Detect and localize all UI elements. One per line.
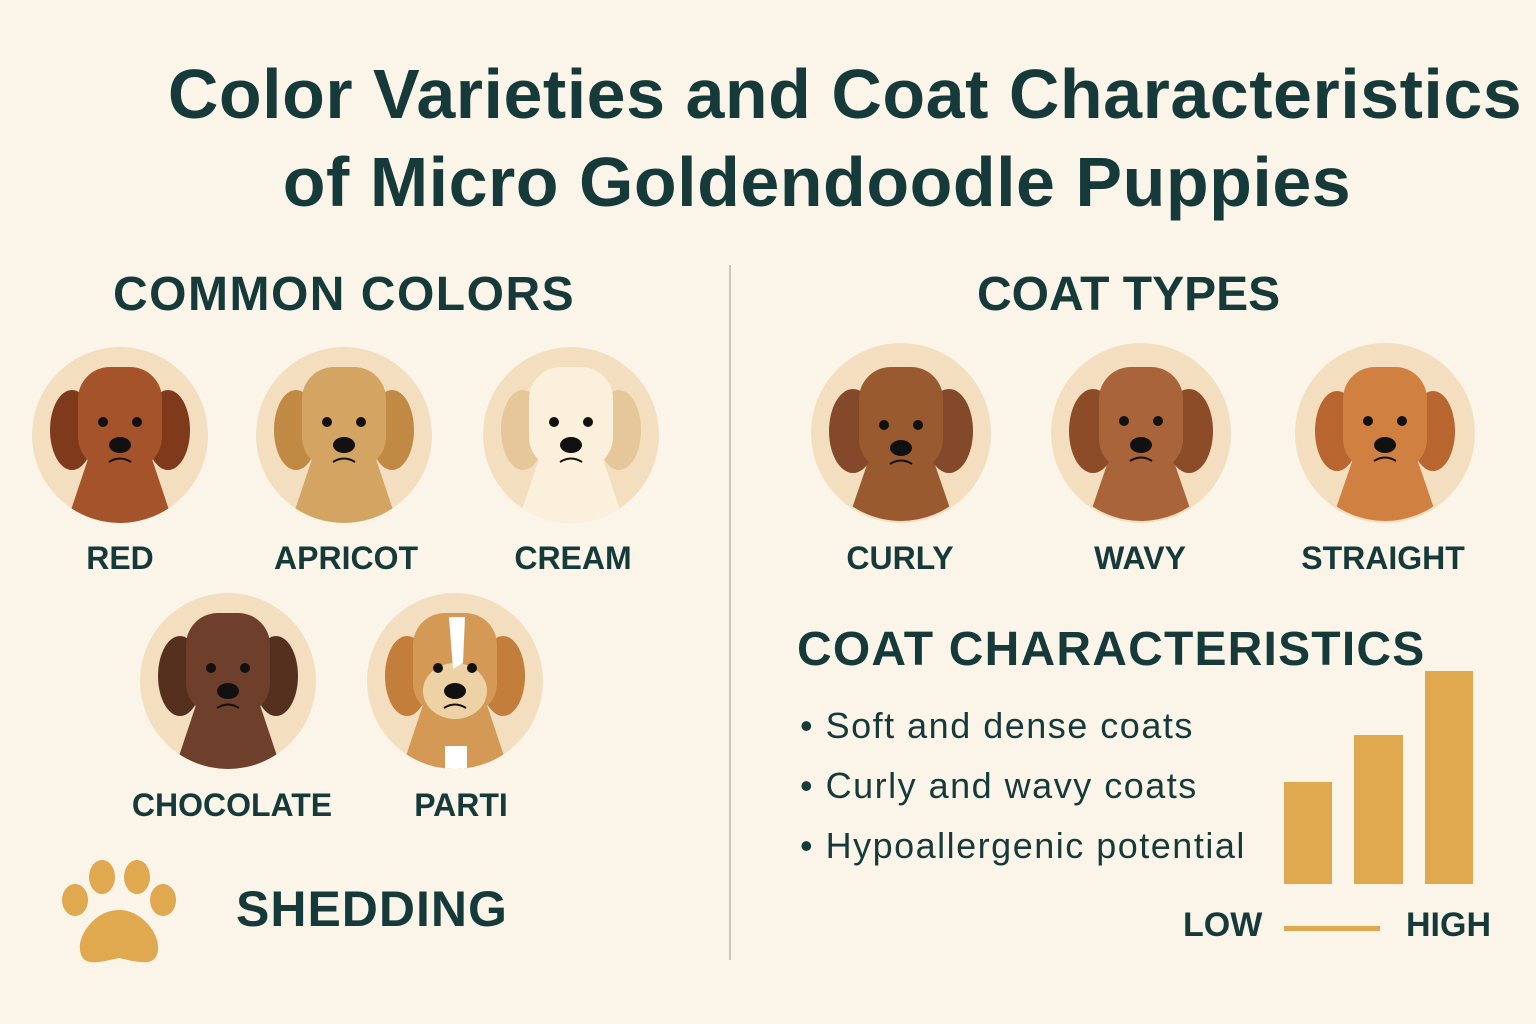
text: WAVY (1094, 540, 1186, 576)
text: STRAIGHT (1301, 540, 1465, 576)
title: of Micro Goldendoodle Puppies (283, 143, 1351, 221)
dog: parti (367, 593, 543, 776)
heading: common colors: COMMON COLORS (113, 268, 575, 321)
text: CREAM (514, 540, 632, 576)
title: Color Varieties and Coat Characteristics (168, 55, 1522, 133)
text: HIGH (1406, 906, 1491, 944)
text: CHOCOLATE (132, 787, 332, 823)
dog illustrations (32, 343, 1475, 962)
bullet list: • Hypoallergenic potential (800, 825, 1246, 866)
dog: cream (483, 347, 659, 525)
bar chart (1284, 671, 1473, 931)
dog: apricot (256, 347, 432, 525)
bullet list: • Curly and wavy coats (800, 765, 1198, 806)
heading: shedding: SHEDDING (236, 881, 508, 937)
dog: curly (811, 343, 991, 523)
bullet list (800, 705, 1246, 866)
bullet list: • Soft and dense coats (800, 705, 1194, 746)
dog: red (32, 347, 208, 525)
heading: coat characteristics: COAT CHARACTERISTICS (797, 623, 1425, 676)
labels: RED (86, 540, 154, 576)
dog: straight (1295, 343, 1475, 523)
text: CURLY (846, 540, 954, 576)
chart labels: LOW (1183, 906, 1262, 944)
icon: paw (62, 860, 176, 962)
heading: coat types: COAT TYPES (977, 268, 1280, 321)
dog: wavy (1051, 343, 1231, 523)
title (168, 55, 1522, 221)
text: APRICOT (274, 540, 418, 576)
text: PARTI (414, 787, 508, 823)
dog: chocolate (140, 593, 316, 771)
